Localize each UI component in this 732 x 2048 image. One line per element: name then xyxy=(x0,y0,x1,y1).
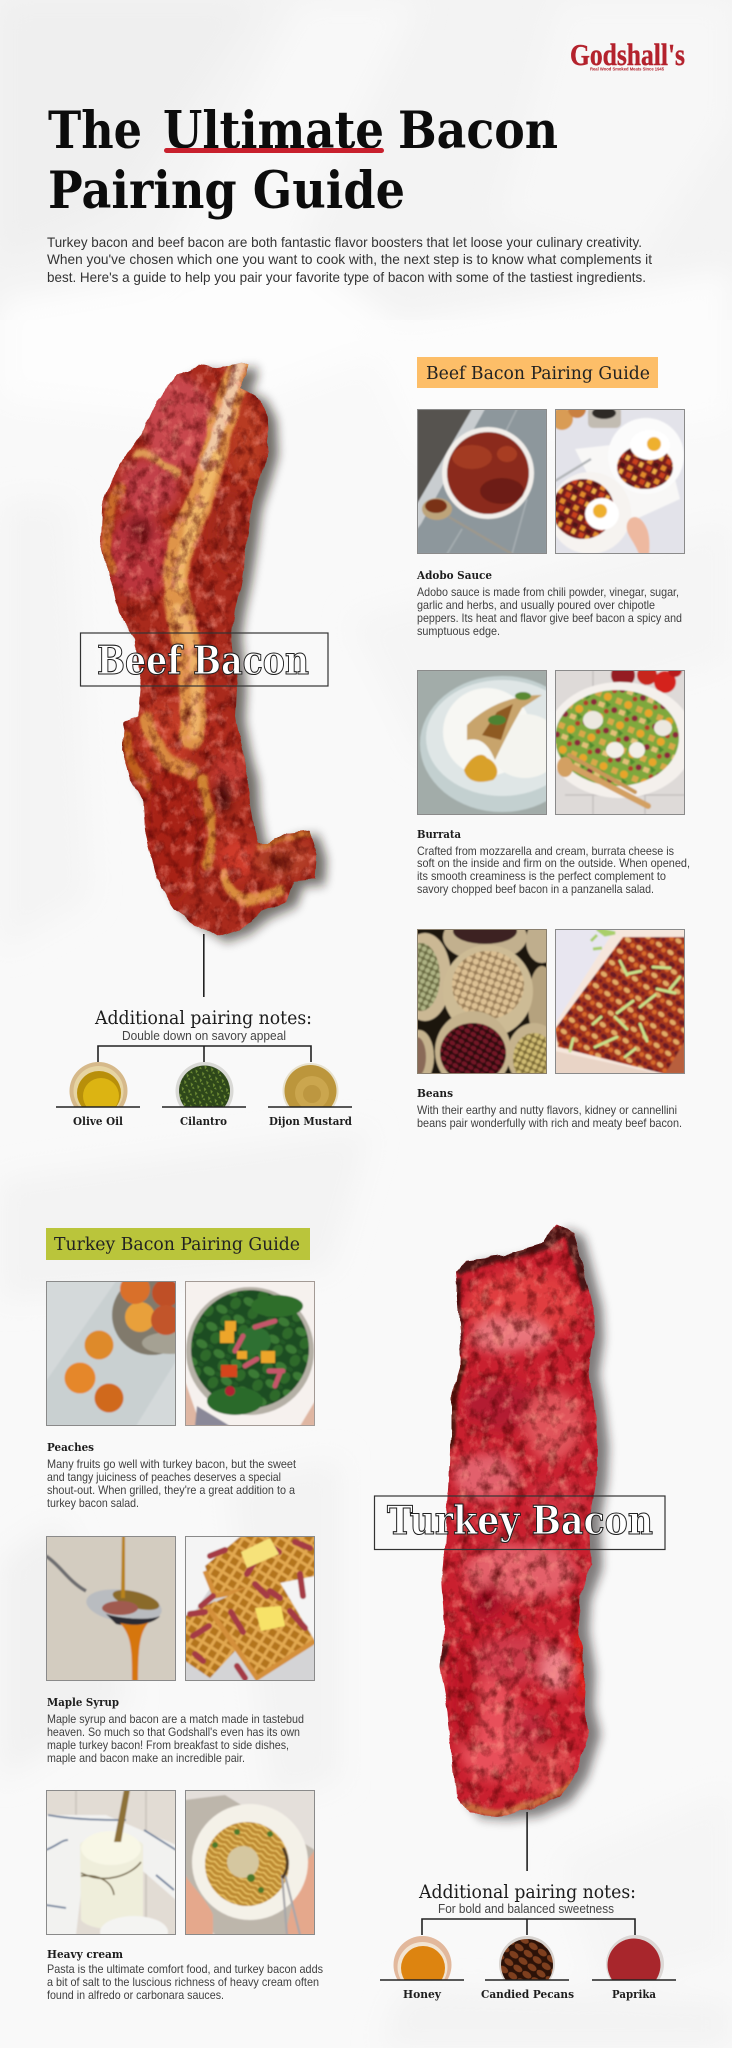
heading: additional notes: Additional pairing notes: xyxy=(418,1881,636,1903)
title: Bacon xyxy=(398,101,558,161)
text block: Heavy cream: Pasta is the ultimate comfort food, and turkey bacon adds xyxy=(47,1963,323,1976)
text block: Adobo Sauce xyxy=(416,568,682,638)
icon: cilantro xyxy=(176,1062,234,1106)
text block: Burrata xyxy=(417,827,690,896)
text block: Peaches: shout-out. When grilled, they're a great addition to a xyxy=(47,1484,296,1497)
text block: Peaches xyxy=(47,1440,297,1510)
text block: Adobo Sauce: Adobo sauce is made from chili powder, vinegar, sugar, xyxy=(417,586,679,599)
label: paprika: Paprika xyxy=(612,1988,656,2001)
photo: panzanella salad xyxy=(555,670,685,815)
heading tag: Beef Bacon Pairing Guide xyxy=(417,357,658,388)
intro paragraph: When you've chosen which one you want to cook with, the next step is to know what complements it xyxy=(47,252,652,267)
text block: Adobo Sauce: sumptuous edge. xyxy=(417,625,500,638)
heading tag: Turkey Bacon Pairing Guide xyxy=(46,1228,310,1260)
beef bacon strip xyxy=(93,356,327,949)
icon: candied pecans xyxy=(499,1936,555,1980)
photo: maple syrup spoon xyxy=(46,1536,176,1681)
title xyxy=(48,101,558,221)
logo: Godshall's: Real Wood Smoked Meats Since 1945 xyxy=(590,66,665,72)
text block: Heavy cream: found in alfredo or carbonara sauces. xyxy=(47,1989,224,2002)
text block: Beans: beans pair wonderfully with rich and meaty beef bacon. xyxy=(417,1117,682,1130)
label: candied pecans: Candied Pecans xyxy=(481,1988,574,2001)
icon: dijon mustard xyxy=(282,1063,338,1106)
text block: Beans: With their earthy and nutty flavors, kidney or cannellini xyxy=(417,1104,677,1117)
label: honey: Honey xyxy=(403,1988,442,2001)
photo: jar of heavy cream xyxy=(46,1790,176,1935)
baselines xyxy=(56,1106,352,1108)
text block: Beans xyxy=(417,1086,682,1130)
text block: Maple Syrup: Maple syrup and bacon are a match made in tastebud xyxy=(47,1713,304,1726)
text block: Burrata: Burrata xyxy=(417,827,461,841)
intro paragraph: best. Here's a guide to help you pair your favorite type of bacon with some of the tastiest ingredients. xyxy=(47,270,646,285)
text block: Burrata: Crafted from mozzarella and cream, burrata cheese is xyxy=(417,845,674,858)
title: Ultimate xyxy=(163,101,384,161)
intro paragraph xyxy=(47,235,652,285)
label: Beef Bacon: Beef Bacon xyxy=(97,638,309,684)
text block: Adobo Sauce: peppers. Its heat and flavor give beef bacon a spicy and xyxy=(417,612,682,625)
label: dijon mustard: Dijon Mustard xyxy=(269,1115,352,1128)
heading: additional notes: Additional pairing notes: xyxy=(94,1007,312,1029)
additional pairing notes: turkey xyxy=(380,1881,676,2001)
label: cilantro: Cilantro xyxy=(180,1115,227,1128)
title: Pairing Guide xyxy=(48,161,405,221)
photo: burrata xyxy=(417,670,547,815)
photo: peaches xyxy=(46,1281,176,1426)
text block: Heavy cream: a bit of salt to the luscious richness of heavy cream often xyxy=(47,1976,319,1989)
text block: Heavy cream xyxy=(47,1947,323,2002)
text block: Peaches: turkey bacon salad. xyxy=(47,1497,139,1510)
intro paragraph: Turkey bacon and beef bacon are both fantastic flavor boosters that let loose your culinary creativity. xyxy=(47,235,642,250)
text block: Beans: Beans xyxy=(417,1086,453,1100)
text block: Maple Syrup xyxy=(47,1695,304,1765)
text block: Maple Syrup: maple and bacon make an incredible pair. xyxy=(47,1752,245,1765)
title: The xyxy=(48,101,142,161)
heading tag: Turkey Bacon Pairing Guide: Turkey Bacon Pairing Guide xyxy=(54,1235,300,1255)
text block: Maple Syrup: maple turkey bacon! From breakfast to side dishes, xyxy=(47,1739,289,1752)
stem line: turkey xyxy=(526,1812,528,1871)
photo: baked beans dish xyxy=(555,929,685,1074)
icon: paprika xyxy=(606,1935,664,1980)
connector bracket xyxy=(98,1046,311,1062)
subheading: bold and balanced: For bold and balanced sweetness xyxy=(438,1901,614,1916)
text block: Burrata: soft on the inside and firm on the outside. When opened, xyxy=(417,857,690,870)
text block: Peaches: Many fruits go well with turkey bacon, but the sweet xyxy=(47,1458,297,1471)
photo: hash with eggs xyxy=(555,409,685,554)
subheading: savory appeal: Double down on savory appeal xyxy=(122,1028,286,1043)
icon: olive oil xyxy=(70,1062,128,1106)
baselines xyxy=(380,1979,676,1981)
photo: adobo sauce bowl xyxy=(417,409,547,554)
text block: Adobo Sauce: garlic and herbs, and usually poured over chipotle xyxy=(417,599,655,612)
text block: Heavy cream: Heavy cream xyxy=(47,1947,123,1961)
text block: Burrata: its smooth creaminess is the perfect complement to xyxy=(417,870,666,883)
label: Turkey Bacon: Turkey Bacon xyxy=(387,1498,653,1544)
connector bracket xyxy=(422,1919,635,1935)
heading tag: Beef Bacon Pairing Guide: Beef Bacon Pairing Guide xyxy=(426,364,650,384)
stem line: beef xyxy=(203,934,205,997)
text block: Maple Syrup: Maple Syrup xyxy=(47,1695,119,1709)
photo: sacks of beans xyxy=(417,929,547,1074)
text block: Peaches: Peaches xyxy=(47,1440,94,1454)
photo: carbonara pasta xyxy=(185,1790,315,1935)
label: olive oil: Olive Oil xyxy=(73,1115,123,1128)
logo: Godshall's: Godshall's xyxy=(570,37,685,72)
text block: Burrata: savory chopped beef bacon in a panzanella salad. xyxy=(417,883,654,896)
text block: Maple Syrup: heaven. So much so that Godshall's even has its own xyxy=(47,1726,300,1739)
photo: spinach salad xyxy=(185,1281,315,1426)
photo: waffles with bacon xyxy=(185,1536,315,1681)
title underline xyxy=(164,148,384,153)
text block: Peaches: and tangy juiciness of peaches deserves a special xyxy=(47,1471,281,1484)
icon: honey xyxy=(394,1936,452,1980)
turkey bacon strip xyxy=(440,1224,616,1828)
additional pairing notes: beef xyxy=(56,1007,352,1128)
text block: Adobo Sauce: Adobo Sauce xyxy=(416,568,492,582)
